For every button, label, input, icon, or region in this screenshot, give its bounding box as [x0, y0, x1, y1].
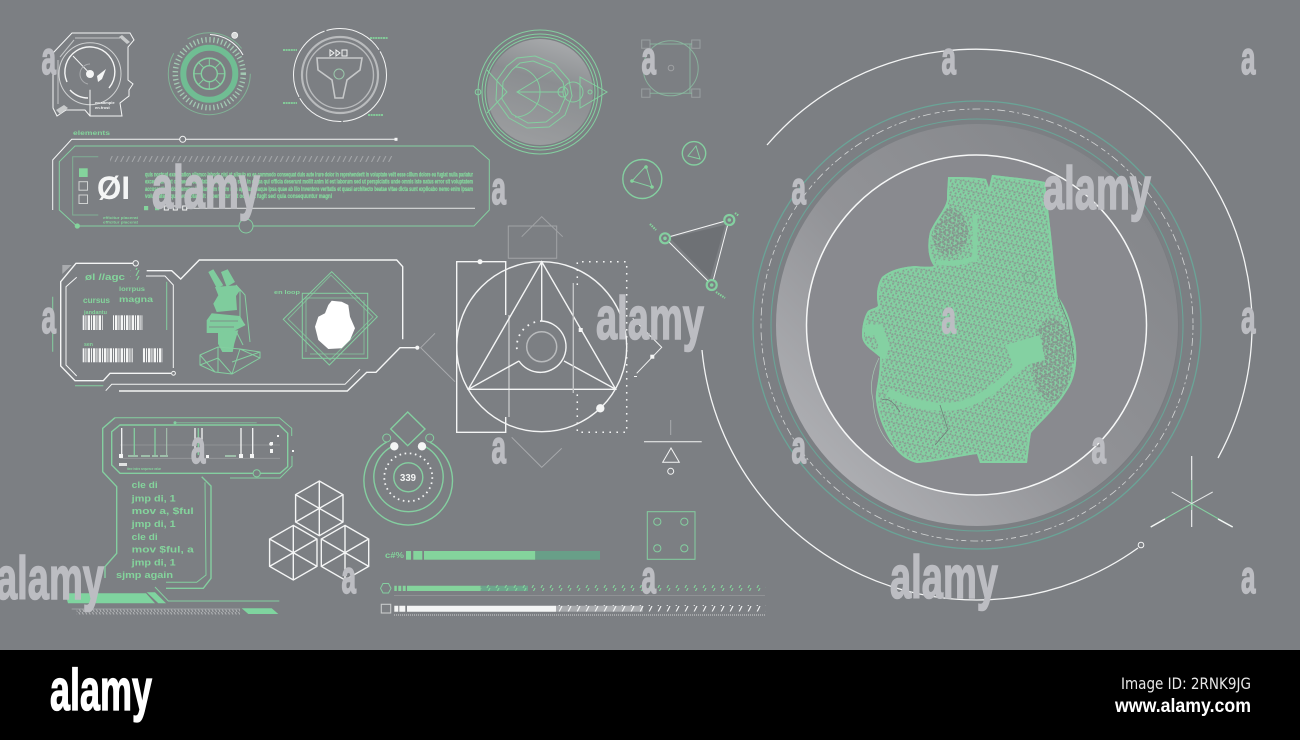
code listing: jmp di, 1: [130, 558, 176, 568]
stock watermarks: alamy: [890, 544, 998, 611]
heading: elements label: elements: [73, 131, 111, 137]
card labels: øl //agc: [85, 272, 125, 282]
stock watermarks: alamy: [596, 285, 704, 352]
footer logo: alamy: [50, 658, 152, 723]
icon: target dial: 339: [400, 473, 416, 484]
timeline chart: [119, 428, 294, 471]
icon: target dial: [364, 412, 452, 525]
icon: balance symbol: [644, 420, 702, 474]
teal rings: [753, 101, 1201, 549]
data text: [145, 172, 473, 200]
code listing: cle di: [132, 480, 158, 490]
chevron below: [512, 437, 562, 467]
caption: [103, 215, 139, 224]
barcodes: [83, 315, 163, 362]
icon: square with four dots: [647, 512, 695, 559]
footer accents: [65, 587, 279, 614]
stock watermarks: alamy: [1043, 155, 1151, 222]
data text: voluptatem quia voluptas sit aspernatur aut odit aut fugit sed quia consequuntur magni: [145, 194, 332, 200]
icon: asterisk star: [1151, 456, 1233, 527]
caption: efficitur placerat: [103, 215, 139, 220]
icon: circle with corner squares: [642, 40, 700, 97]
data text: accusantium doloremque laudantium totam rem aperiam eaque ipsa quae ab illo inventore veritatis et quasi architecto beatae vitae dicta sunt explicabo nemo enim ipsam: [145, 187, 473, 193]
icon: square radar: en.sample: [95, 100, 115, 105]
stock watermarks: a: [792, 162, 806, 214]
heart solid muscle bands: [862, 175, 1076, 463]
panel: long data panel: [53, 136, 489, 233]
progress bar: green hatched: [380, 584, 766, 595]
data text: excepteur sint occaecat cupidatat non proident sunt in culpa qui officia deserunt mollit anim id est laborum sed ut perspiciatis unde omnis iste natus error sit voluptatem: [145, 180, 473, 186]
stock watermarks: a: [342, 551, 356, 603]
data text: quis nostrud exercitation ullamco laboris nisi ut aliquip ex ea commodo consequat duis aute irure dolor in reprehenderit in voluptate velit esse cillum dolore eu fugiat nulla pariatur: [145, 172, 473, 178]
code listing: jmp di, 1: [130, 519, 176, 529]
stock watermarks: a: [492, 162, 506, 214]
diagram: circle triangle geometry: [457, 217, 627, 467]
code listing: jmp di, 1: [130, 494, 176, 504]
microscope: [200, 269, 260, 374]
stock watermarks: a: [942, 32, 956, 84]
progress bar: green percent: c#%: [385, 551, 404, 560]
outer white arcs: [767, 49, 1252, 458]
stock watermarks: a: [642, 32, 656, 84]
stock watermarks: [0, 32, 1256, 612]
chart: large heart scan rings: [702, 49, 1252, 600]
heart thumbnail in diamond: en loop: [274, 290, 301, 296]
arrow: right chevron marker: [633, 318, 662, 376]
icon: square radar: en.frost: [95, 105, 110, 110]
stock watermarks: alamy: [0, 545, 104, 612]
icon: square radar: [53, 33, 134, 116]
stock watermarks: alamy: [152, 154, 260, 221]
icon: glass sphere: [475, 30, 607, 154]
stock watermarks: a: [191, 421, 206, 473]
house shape: [508, 217, 563, 258]
code listing: mov a, $ful: [132, 506, 194, 516]
stock watermarks: a: [942, 291, 956, 343]
section number: ØI: [97, 170, 130, 206]
inner white ring: [806, 155, 1146, 495]
heart wireframe: [862, 175, 1076, 463]
footer band: [0, 650, 1300, 740]
stock watermarks: a: [492, 421, 506, 473]
icon: trefoil dial: [283, 28, 388, 122]
stock watermarks: a: [42, 291, 56, 343]
stock watermarks: a: [1092, 421, 1106, 473]
image id: Image ID: 2RNK9JG: [1121, 674, 1251, 693]
icon: small node badges: [623, 142, 706, 198]
stock watermarks: a: [642, 551, 656, 603]
progress bar: white hatched: [381, 604, 766, 615]
code listing: mov $ful, a: [132, 544, 195, 554]
progress bar: green percent: [385, 551, 600, 560]
caption: efficitur placerat: [103, 220, 139, 224]
icon: hexagon cubes: [270, 481, 369, 580]
icon: triangle with nodes: [650, 213, 739, 298]
code listing: [116, 480, 195, 580]
timeline chart: time index sequence value: [127, 466, 162, 471]
card labels: cursus: [83, 296, 111, 305]
card labels: magna: [119, 295, 154, 304]
arrow: left chevron connector: [421, 333, 455, 382]
stock watermarks: a: [1241, 291, 1256, 343]
stock watermarks: a: [792, 421, 806, 473]
stock watermarks: a: [1241, 551, 1256, 603]
heart thumbnail in diamond: [274, 272, 377, 365]
glass disc: [776, 124, 1178, 526]
website: www.alamy.com: [1114, 696, 1251, 717]
icon: green gauge: [168, 32, 250, 115]
card labels: jandantu: [83, 310, 107, 316]
panel: ID card with microscope and heart: [53, 260, 419, 391]
stock watermarks: a: [1241, 32, 1256, 84]
code listing: sjmp again: [116, 570, 173, 580]
status squares: [79, 168, 88, 204]
code listing: cle di: [132, 532, 158, 542]
card labels: [83, 272, 154, 348]
card labels: sen: [84, 342, 93, 348]
card labels: lorrpus: [119, 287, 146, 293]
step markers: [144, 206, 475, 210]
stock watermarks: a: [42, 32, 56, 84]
panel: code terminal: [65, 418, 294, 614]
